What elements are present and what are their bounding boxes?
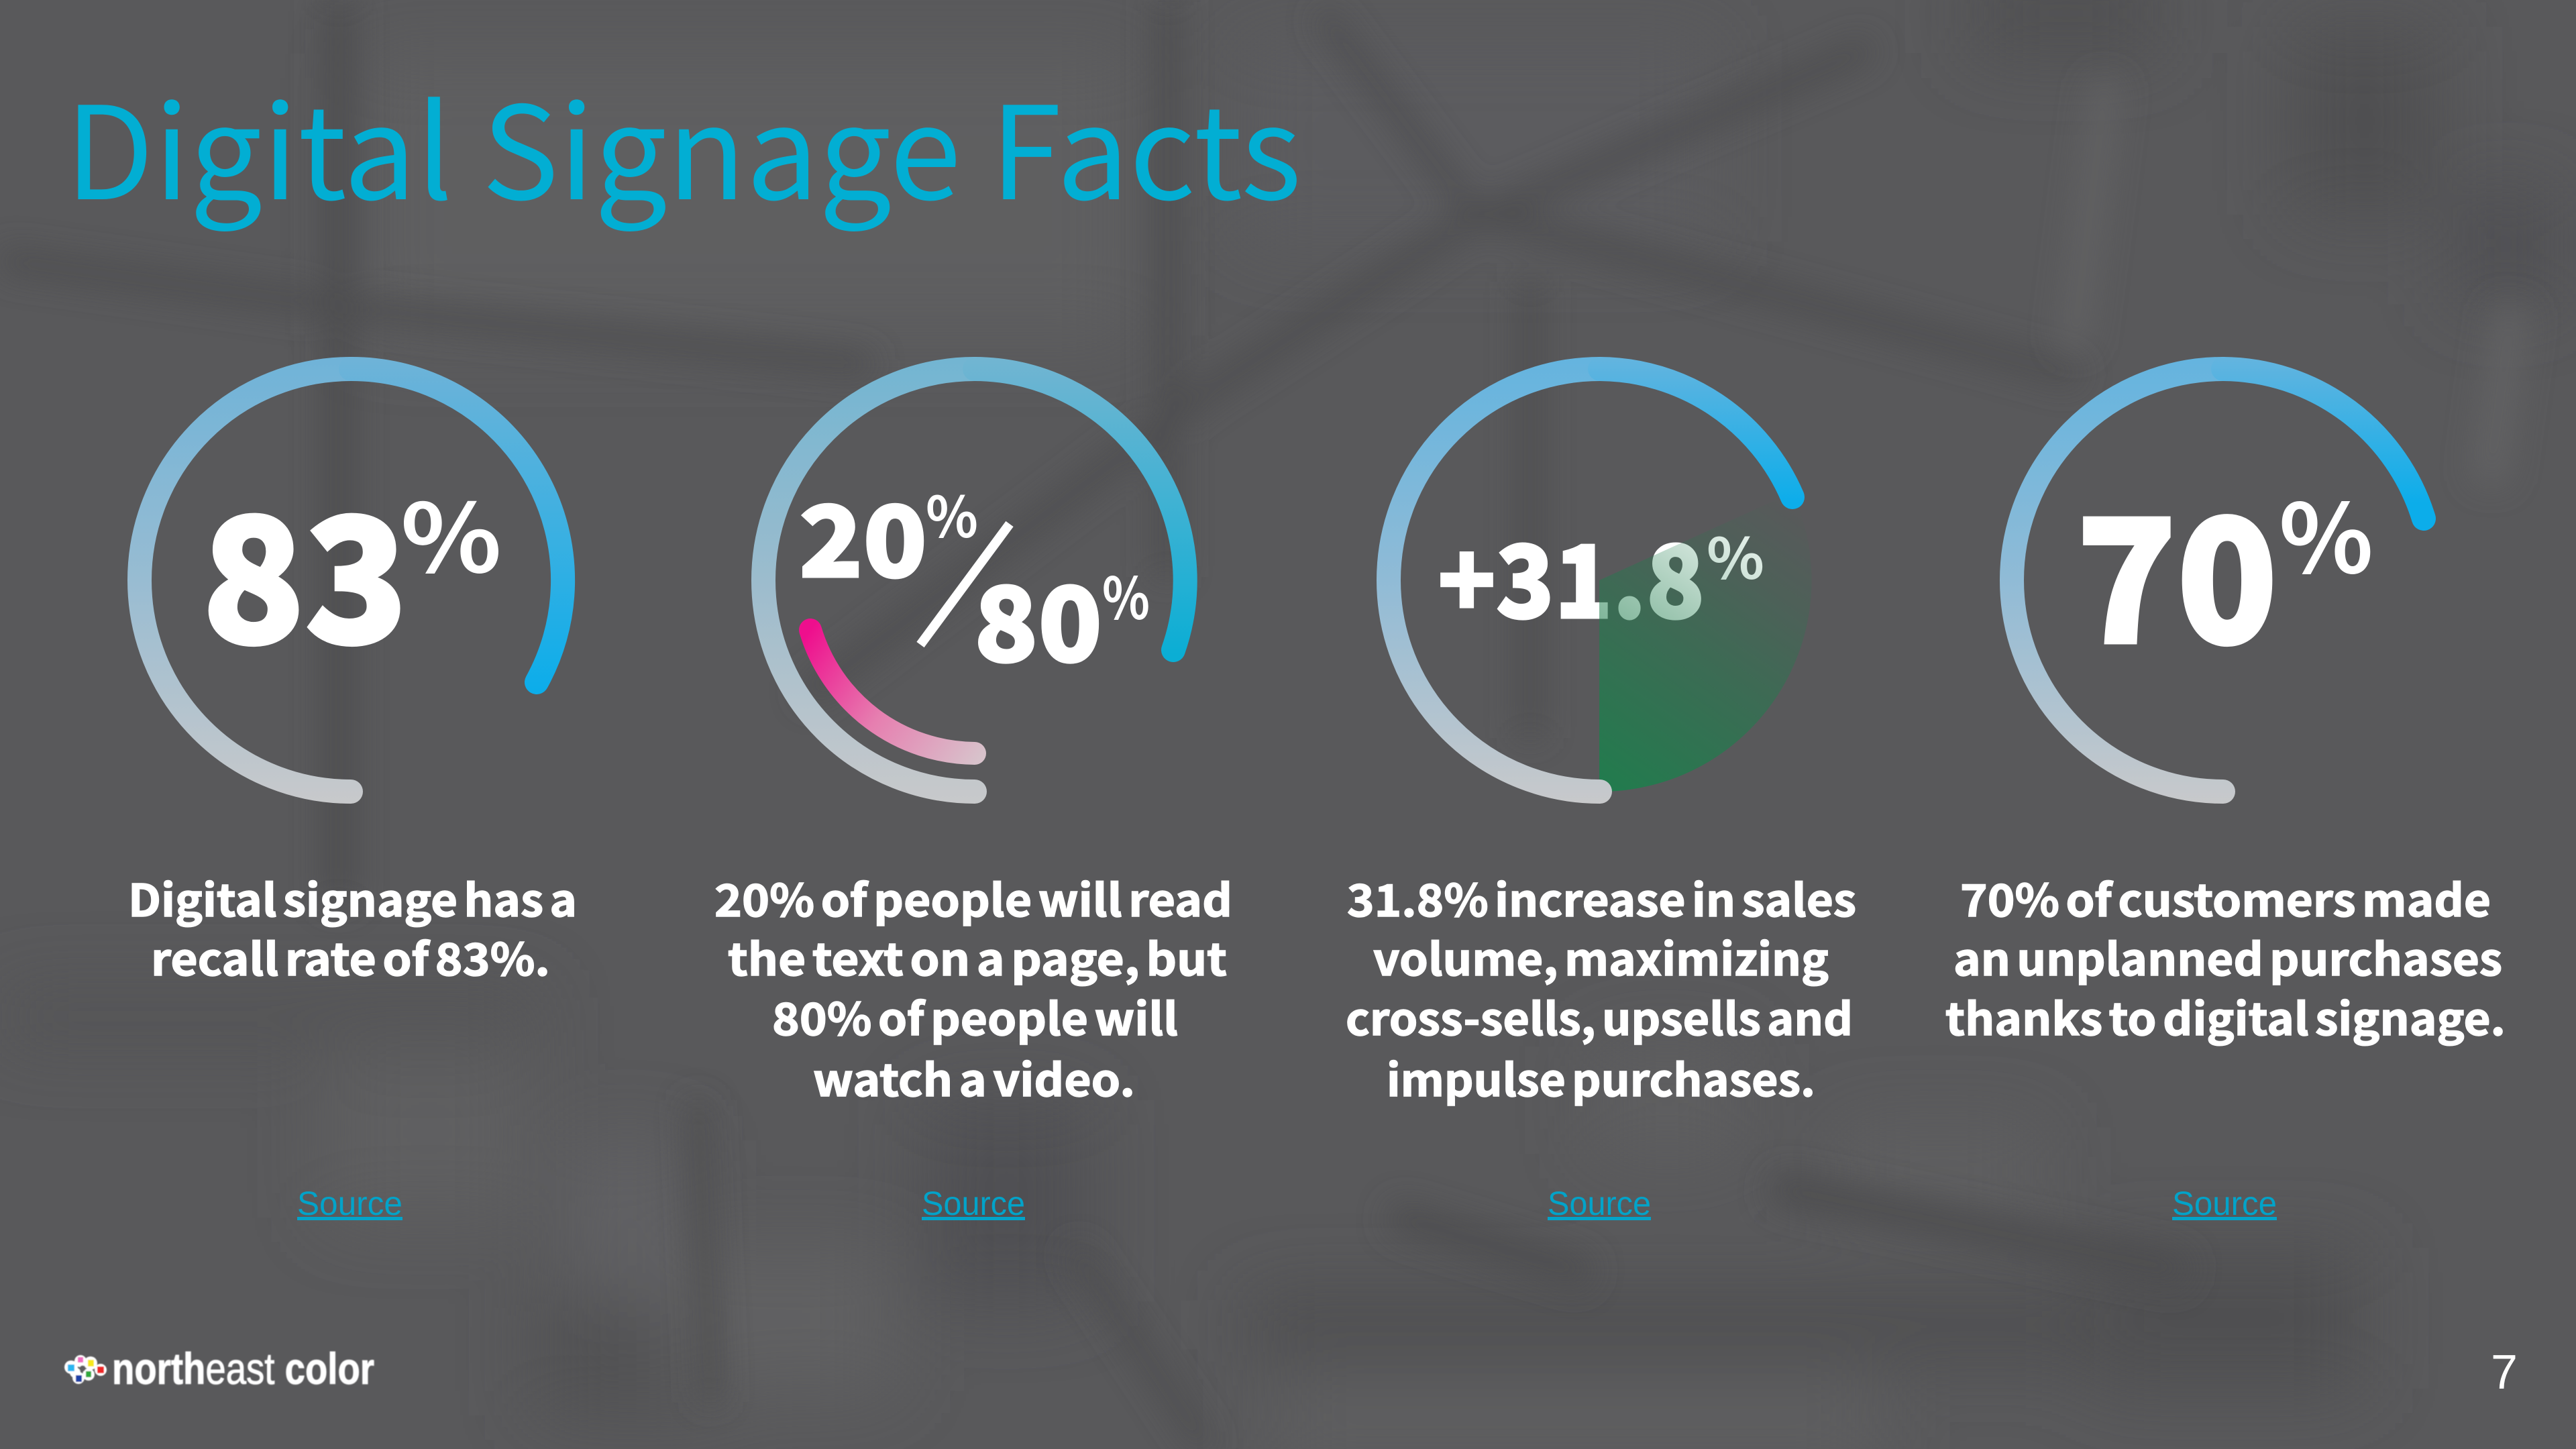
big number 70%: 70: [2076, 443, 2277, 692]
big number 20% / 80%: 20: [799, 463, 927, 606]
gauge ring 80%: [763, 369, 1185, 792]
description 83%: [128, 865, 577, 989]
description 20/80: [714, 865, 1232, 1110]
source link 3: Source: [1548, 1185, 1651, 1222]
panel: 70% unplanned purchases: [1945, 369, 2506, 1222]
green fading sector 31.8%: [1599, 492, 1812, 792]
description 83%: Digital signage has a: [128, 865, 577, 930]
description 83%: recall rate of 83%.: [151, 924, 550, 989]
description 31.8%: [1346, 865, 1856, 1110]
description 70%: [1945, 865, 2506, 1049]
big number 20% / 80%: %: [926, 473, 978, 554]
big number +31.8%: %: [1707, 515, 1764, 596]
title: Digital Signage Facts: [65, 50, 1301, 237]
description 31.8%: impulse purchases.: [1387, 1045, 1815, 1110]
source link 2: Source: [922, 1185, 1025, 1222]
description 31.8%: cross-sells, upsells and: [1346, 984, 1853, 1049]
description 31.8%: 31.8% increase in sales: [1347, 865, 1856, 930]
big number 83%: 83: [202, 443, 408, 693]
description 31.8%: volume, maximizing: [1373, 924, 1829, 989]
big number 20% / 80%: 80: [974, 542, 1102, 692]
gauge ring 70%: [2012, 369, 2424, 792]
panel: 20% / 80% text vs video: [714, 369, 1232, 1222]
panel: 83% recall rate: [128, 369, 577, 1222]
page number: 7: [2491, 1346, 2518, 1399]
description 20/80: 20% of people will read: [714, 865, 1232, 930]
description 20/80: the text on a page, but: [728, 924, 1227, 989]
big number 83%: %: [400, 462, 502, 600]
icon: palette dots: [64, 1355, 107, 1384]
description 20/80: 80% of people will: [772, 984, 1178, 1049]
source link 1: Source: [297, 1185, 402, 1222]
description 70%: thanks to digital signage.: [1945, 984, 2506, 1049]
big number 20% / 80%: %: [1102, 552, 1150, 636]
description 70%: an unplanned purchases: [1953, 924, 2502, 989]
big number 70%: %: [2279, 462, 2373, 600]
wordmark: northeast color: [112, 1344, 374, 1393]
description 20/80: watch a video.: [813, 1045, 1135, 1110]
logo: northeast color: [64, 1344, 374, 1393]
description 70%: 70% of customers made: [1960, 865, 2491, 930]
source link 4: Source: [2172, 1185, 2277, 1222]
gauge ring 68.2%: [1389, 369, 1792, 792]
panel: +31.8% sales volume: [1346, 369, 1856, 1222]
gauge ring 83%: [140, 369, 563, 792]
big number +31.8%: +31.8: [1438, 502, 1705, 647]
big number 20% / 80%: [799, 463, 1150, 692]
inner pink arc 20%: [810, 630, 975, 753]
